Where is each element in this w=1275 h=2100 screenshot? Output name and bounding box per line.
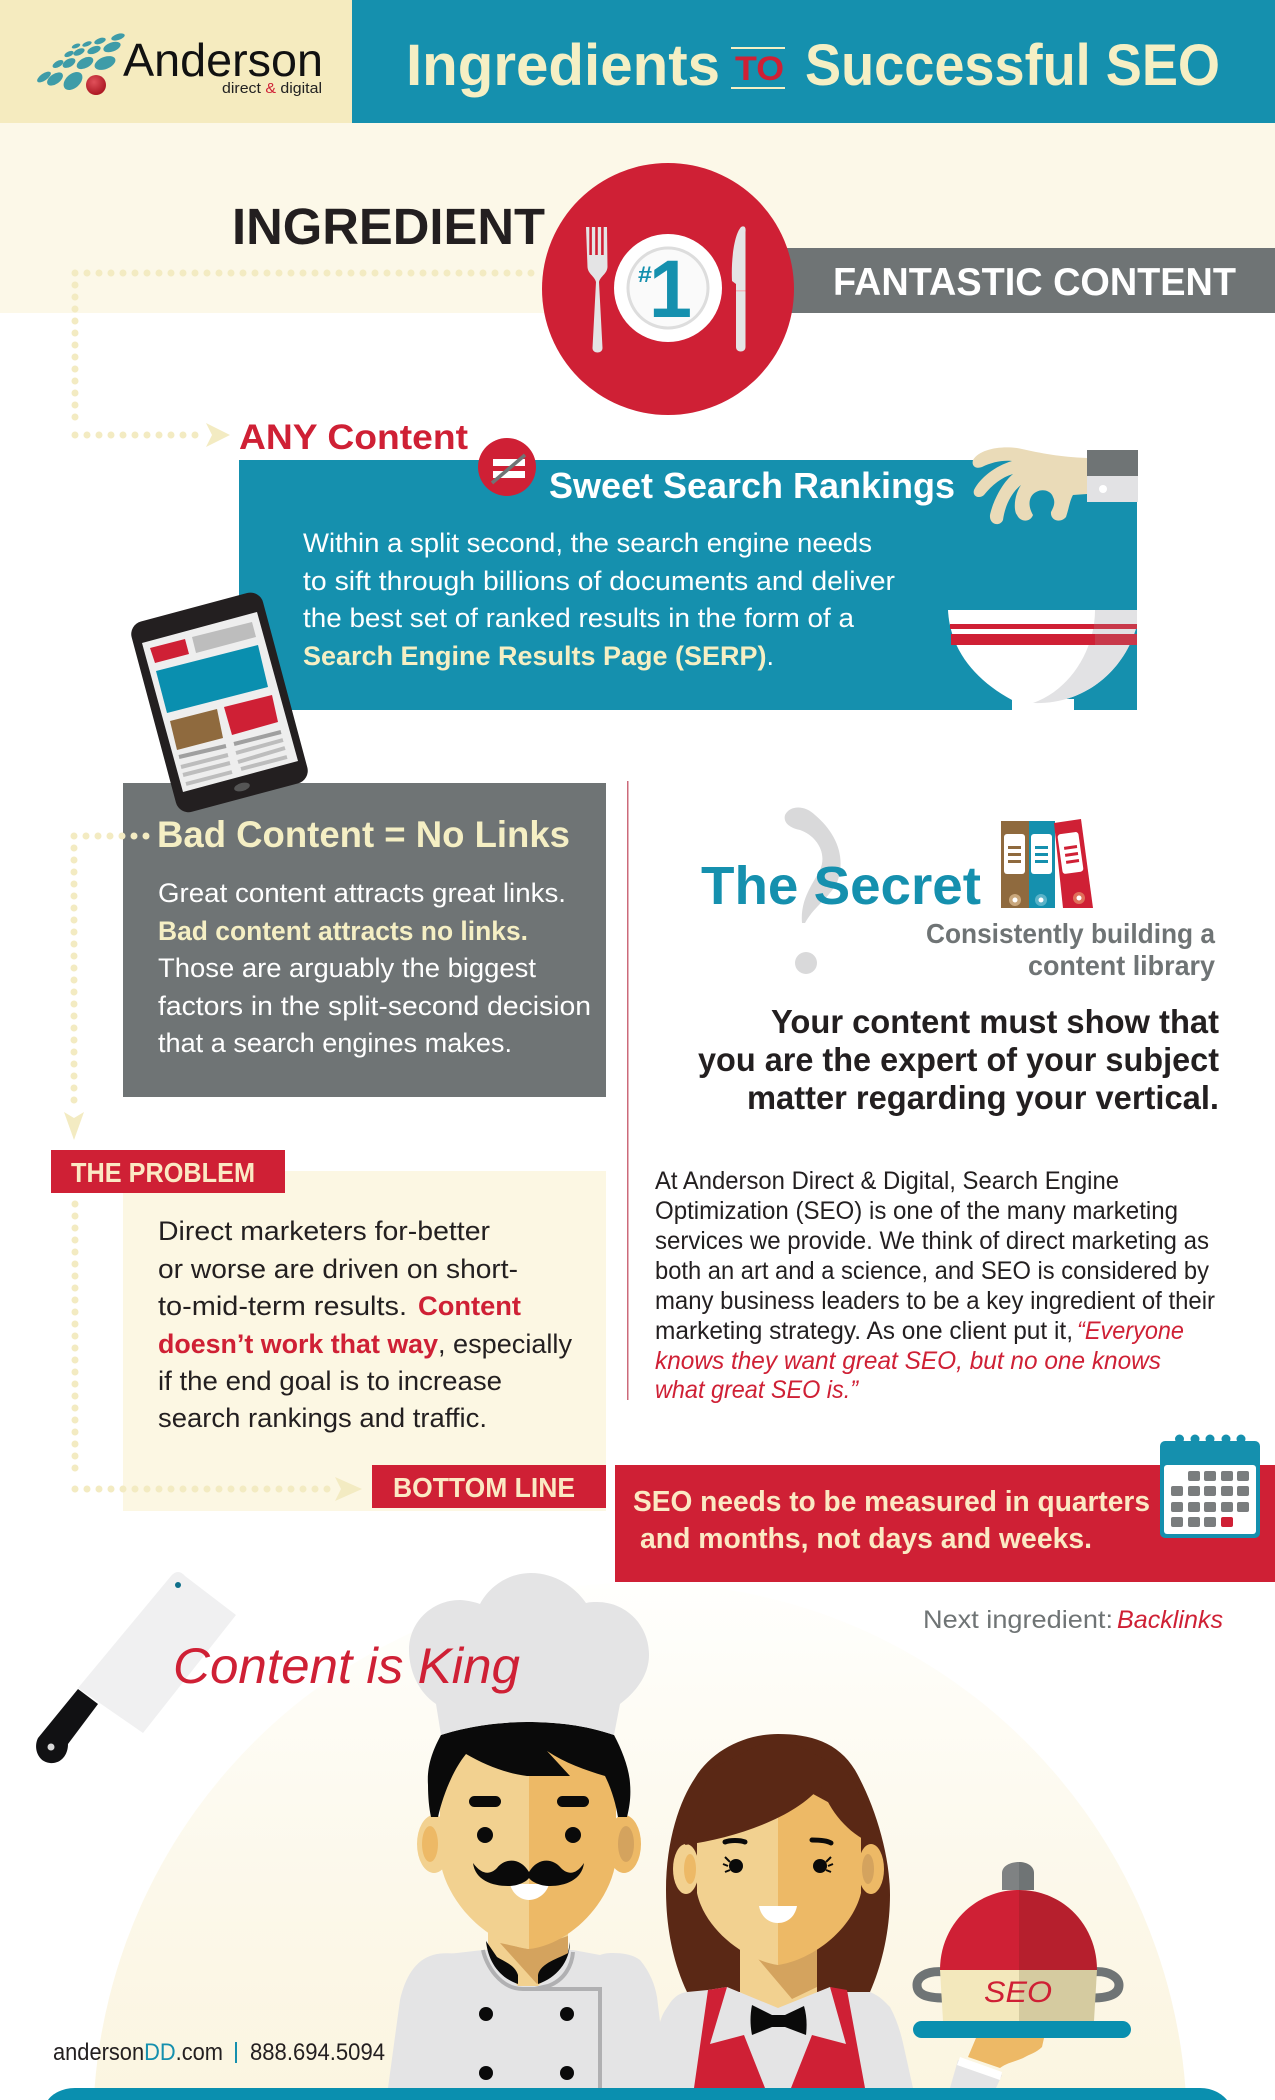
statement	[698, 1003, 1219, 1116]
the secret heading: The Secret	[701, 856, 981, 916]
title: Successful SEO	[805, 33, 1220, 98]
icon: not equal	[478, 438, 536, 496]
body text: Bad content attracts no links.	[158, 916, 528, 946]
cloche base	[940, 1970, 1097, 2021]
icon: calendar	[1160, 1434, 1260, 1538]
icon: plate and cutlery	[542, 163, 794, 415]
body text: doesn’t work that way	[158, 1329, 438, 1359]
body text: to sift through billions of documents and deliver	[303, 566, 895, 596]
bottom line tag	[372, 1465, 606, 1508]
title	[406, 33, 1220, 98]
paragraph: knows they want great SEO, but no one knows	[655, 1347, 1161, 1375]
heading: Bad Content = No Links	[157, 814, 570, 855]
serving tray	[913, 2021, 1131, 2038]
icon: bowl	[948, 610, 1137, 710]
chef face	[440, 1740, 616, 1949]
panel: bad content	[123, 783, 606, 1097]
logo	[35, 32, 323, 97]
chef hair	[428, 1722, 630, 1817]
footer contact	[53, 2039, 385, 2066]
arrow: to bottom line	[335, 1477, 362, 1501]
illustration: waitress	[660, 1734, 913, 2088]
paragraph: many business leaders to be a key ingredient of their	[655, 1287, 1215, 1315]
header	[0, 0, 1275, 123]
body text: to-mid-term results.	[158, 1291, 407, 1321]
chef jacket	[388, 1950, 668, 2088]
number one: #	[638, 262, 652, 287]
the problem tag	[51, 1150, 285, 1193]
panel: search rankings	[239, 460, 1137, 710]
number one: 1	[649, 244, 692, 335]
body text: Those are arguably the biggest	[158, 953, 536, 983]
chef buttons	[479, 2007, 574, 2080]
logo: direct & digital	[222, 80, 322, 97]
waitress shirt	[660, 1987, 913, 2088]
content is king heading: Content is King	[173, 1638, 520, 1694]
arrow: down to the problem	[64, 1112, 84, 1140]
paragraph: marketing strategy. As one client put it,	[655, 1317, 1073, 1345]
body text: or worse are driven on short-	[158, 1254, 518, 1284]
title: TO	[735, 50, 784, 88]
icon: question mark	[785, 808, 841, 974]
chef hat	[409, 1573, 649, 1735]
the secret subheading	[926, 918, 1215, 981]
logo: Anderson	[123, 34, 323, 86]
waitress face	[697, 1775, 861, 1965]
seo label: SEO	[984, 1976, 1052, 2009]
paragraph: At Anderson Direct & Digital, Search Engine	[655, 1167, 1119, 1195]
title: Ingredients	[406, 33, 720, 98]
fantastic content banner: FANTASTIC CONTENT	[833, 261, 1236, 304]
waitress hand	[950, 2038, 1044, 2088]
next ingredient: Backlinks	[1117, 1606, 1223, 1634]
waitress fringe	[685, 1735, 871, 1845]
panel: bottom line statement: and months, not days and weeks.	[640, 1523, 1092, 1555]
cloche dome	[940, 1890, 1097, 1970]
ingredient label: INGREDIENT	[232, 198, 545, 255]
icon: hand	[973, 447, 1138, 524]
icon: cleaver	[36, 1572, 236, 1763]
footer contact: 888.694.5094	[250, 2039, 385, 2066]
paragraph: “Everyone	[1077, 1317, 1184, 1345]
icon: tablet	[128, 590, 311, 815]
cloche handles	[917, 1972, 1119, 1998]
divider line	[627, 781, 628, 1400]
body text: factors in the split-second decision	[158, 991, 591, 1021]
chef neck	[488, 1925, 568, 1986]
next ingredient	[923, 1606, 1223, 1634]
panel: the problem	[123, 1171, 606, 1511]
background semicircle	[94, 1583, 1186, 2100]
next ingredient: Next ingredient:	[923, 1606, 1113, 1634]
body text: Within a split second, the search engine needs	[303, 528, 872, 558]
chef collar	[483, 1941, 600, 2088]
paragraph	[655, 1167, 1215, 1404]
statement: matter regarding your vertical.	[747, 1079, 1219, 1116]
waitress ears	[673, 1844, 884, 1894]
body text: Direct marketers for-better	[158, 1216, 490, 1246]
body text: Content	[418, 1291, 521, 1321]
waitress vest	[694, 1987, 865, 2088]
body text	[158, 1216, 572, 1433]
illustration: serving cloche	[913, 1862, 1131, 2088]
dotted connector middle	[74, 836, 150, 1110]
dotted connector top	[75, 273, 540, 435]
paragraph: services we provide. We think of direct marketing as	[655, 1227, 1209, 1255]
paragraph: what great SEO is.”	[655, 1376, 860, 1404]
icon: knife	[732, 226, 746, 352]
bow tie	[750, 2005, 807, 2035]
body text: , especially	[438, 1329, 572, 1359]
body text: Great content attracts great links.	[158, 878, 566, 908]
icon: fork	[586, 227, 607, 352]
dotted connector bottom	[75, 1204, 335, 1489]
illustration: chef	[388, 1573, 668, 2088]
waitress neck	[740, 1945, 817, 2010]
waitress hair back	[666, 1734, 890, 1992]
footer contact: andersonDD.com	[53, 2039, 223, 2066]
body text: that a search engines makes.	[158, 1028, 512, 1058]
the problem tag: THE PROBLEM	[71, 1157, 255, 1188]
body text: if the end goal is to increase	[158, 1366, 502, 1396]
body text: search rankings and traffic.	[158, 1403, 487, 1433]
heading: Sweet Search Rankings	[549, 465, 955, 506]
panel: bottom line statement	[615, 1465, 1275, 1582]
body text: the best set of ranked results in the form of a	[303, 603, 855, 633]
body text: Search Engine Results Page (SERP).	[303, 641, 774, 671]
fantastic content banner	[780, 248, 1275, 313]
paragraph: both an art and a science, and SEO is considered by	[655, 1257, 1209, 1285]
chef ears	[417, 1815, 641, 1873]
any content heading: ANY Content	[239, 418, 468, 457]
footer bar	[48, 2088, 1227, 2100]
body text	[303, 528, 895, 671]
arrow: to any content	[206, 423, 230, 447]
bottom line tag: BOTTOM LINE	[393, 1472, 575, 1503]
cream band	[0, 123, 1275, 313]
statement: you are the expert of your subject	[698, 1041, 1219, 1078]
cloche knob	[1002, 1862, 1034, 1890]
body text	[158, 878, 591, 1058]
icon: binders	[1001, 819, 1093, 908]
paragraph: Optimization (SEO) is one of the many marketing	[655, 1197, 1178, 1225]
the secret subheading: Consistently building a	[926, 918, 1215, 949]
the secret subheading: content library	[1028, 950, 1215, 981]
statement: Your content must show that	[771, 1003, 1219, 1040]
panel: bottom line statement: SEO needs to be measured in quarters	[633, 1486, 1150, 1518]
